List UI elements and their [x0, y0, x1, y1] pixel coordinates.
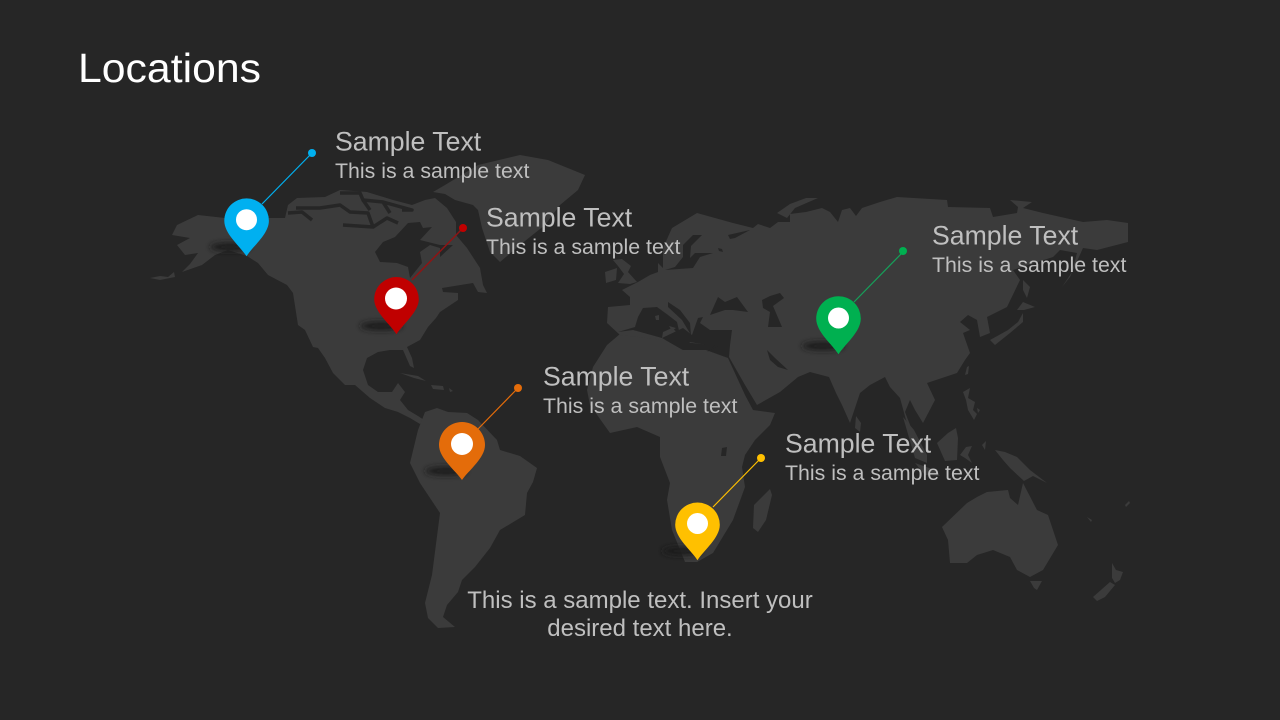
Madagascar — [753, 489, 772, 532]
Western Mediterranean — [618, 307, 680, 338]
world map — [150, 155, 1130, 628]
Japan and Sakhalin — [990, 313, 1023, 345]
label: orange: This is a sample text — [543, 394, 737, 418]
label: green — [932, 220, 1126, 277]
Novaya Zemlya — [777, 198, 818, 218]
label: yellow: Sample Text — [785, 428, 932, 458]
label: blue: Sample Text — [335, 126, 482, 156]
label: red — [486, 202, 680, 259]
Eastern Mediterranean — [662, 317, 732, 350]
marker: yellow — [662, 454, 765, 560]
label: green: This is a sample text — [932, 253, 1126, 277]
label: yellow: This is a sample text — [785, 461, 979, 485]
label: blue: This is a sample text — [335, 159, 529, 183]
Black Sea — [710, 297, 748, 315]
Eurasia — [607, 197, 1128, 430]
caption: desired text here. — [547, 615, 733, 642]
marker: blue — [210, 149, 316, 256]
caption: This is a sample text. Insert your — [467, 587, 813, 614]
Australia — [942, 483, 1058, 577]
marker: red — [360, 224, 467, 334]
marker: orange — [425, 384, 522, 480]
South East Asia islands — [965, 366, 969, 375]
Lake Victoria — [721, 447, 727, 456]
caribbean — [400, 373, 426, 381]
Suez — [707, 345, 718, 352]
label: blue — [335, 126, 529, 183]
Adriatic Sea — [668, 302, 691, 335]
label: orange: Sample Text — [543, 362, 690, 392]
title: Locations — [78, 45, 261, 91]
British Isles — [613, 259, 637, 284]
Persian Gulf — [767, 350, 788, 370]
New Zealand — [1112, 563, 1123, 583]
Greenland — [433, 155, 585, 262]
Canadian arctic channels — [288, 193, 412, 227]
Corsica and Sicily — [655, 315, 659, 320]
North America — [172, 190, 487, 424]
label: yellow — [785, 428, 979, 485]
marker: green — [802, 247, 907, 354]
caption — [467, 587, 813, 642]
New Guinea — [995, 450, 1047, 483]
White Sea — [728, 230, 750, 239]
Africa — [587, 332, 775, 562]
label: green: Sample Text — [932, 220, 1079, 250]
Caspian Sea — [762, 293, 784, 327]
label: red: Sample Text — [486, 202, 633, 232]
Hudson Bay — [375, 222, 453, 278]
label: red: This is a sample text — [486, 235, 680, 259]
label: orange — [543, 362, 737, 418]
Baltic Sea — [665, 235, 713, 270]
South America — [410, 408, 537, 628]
